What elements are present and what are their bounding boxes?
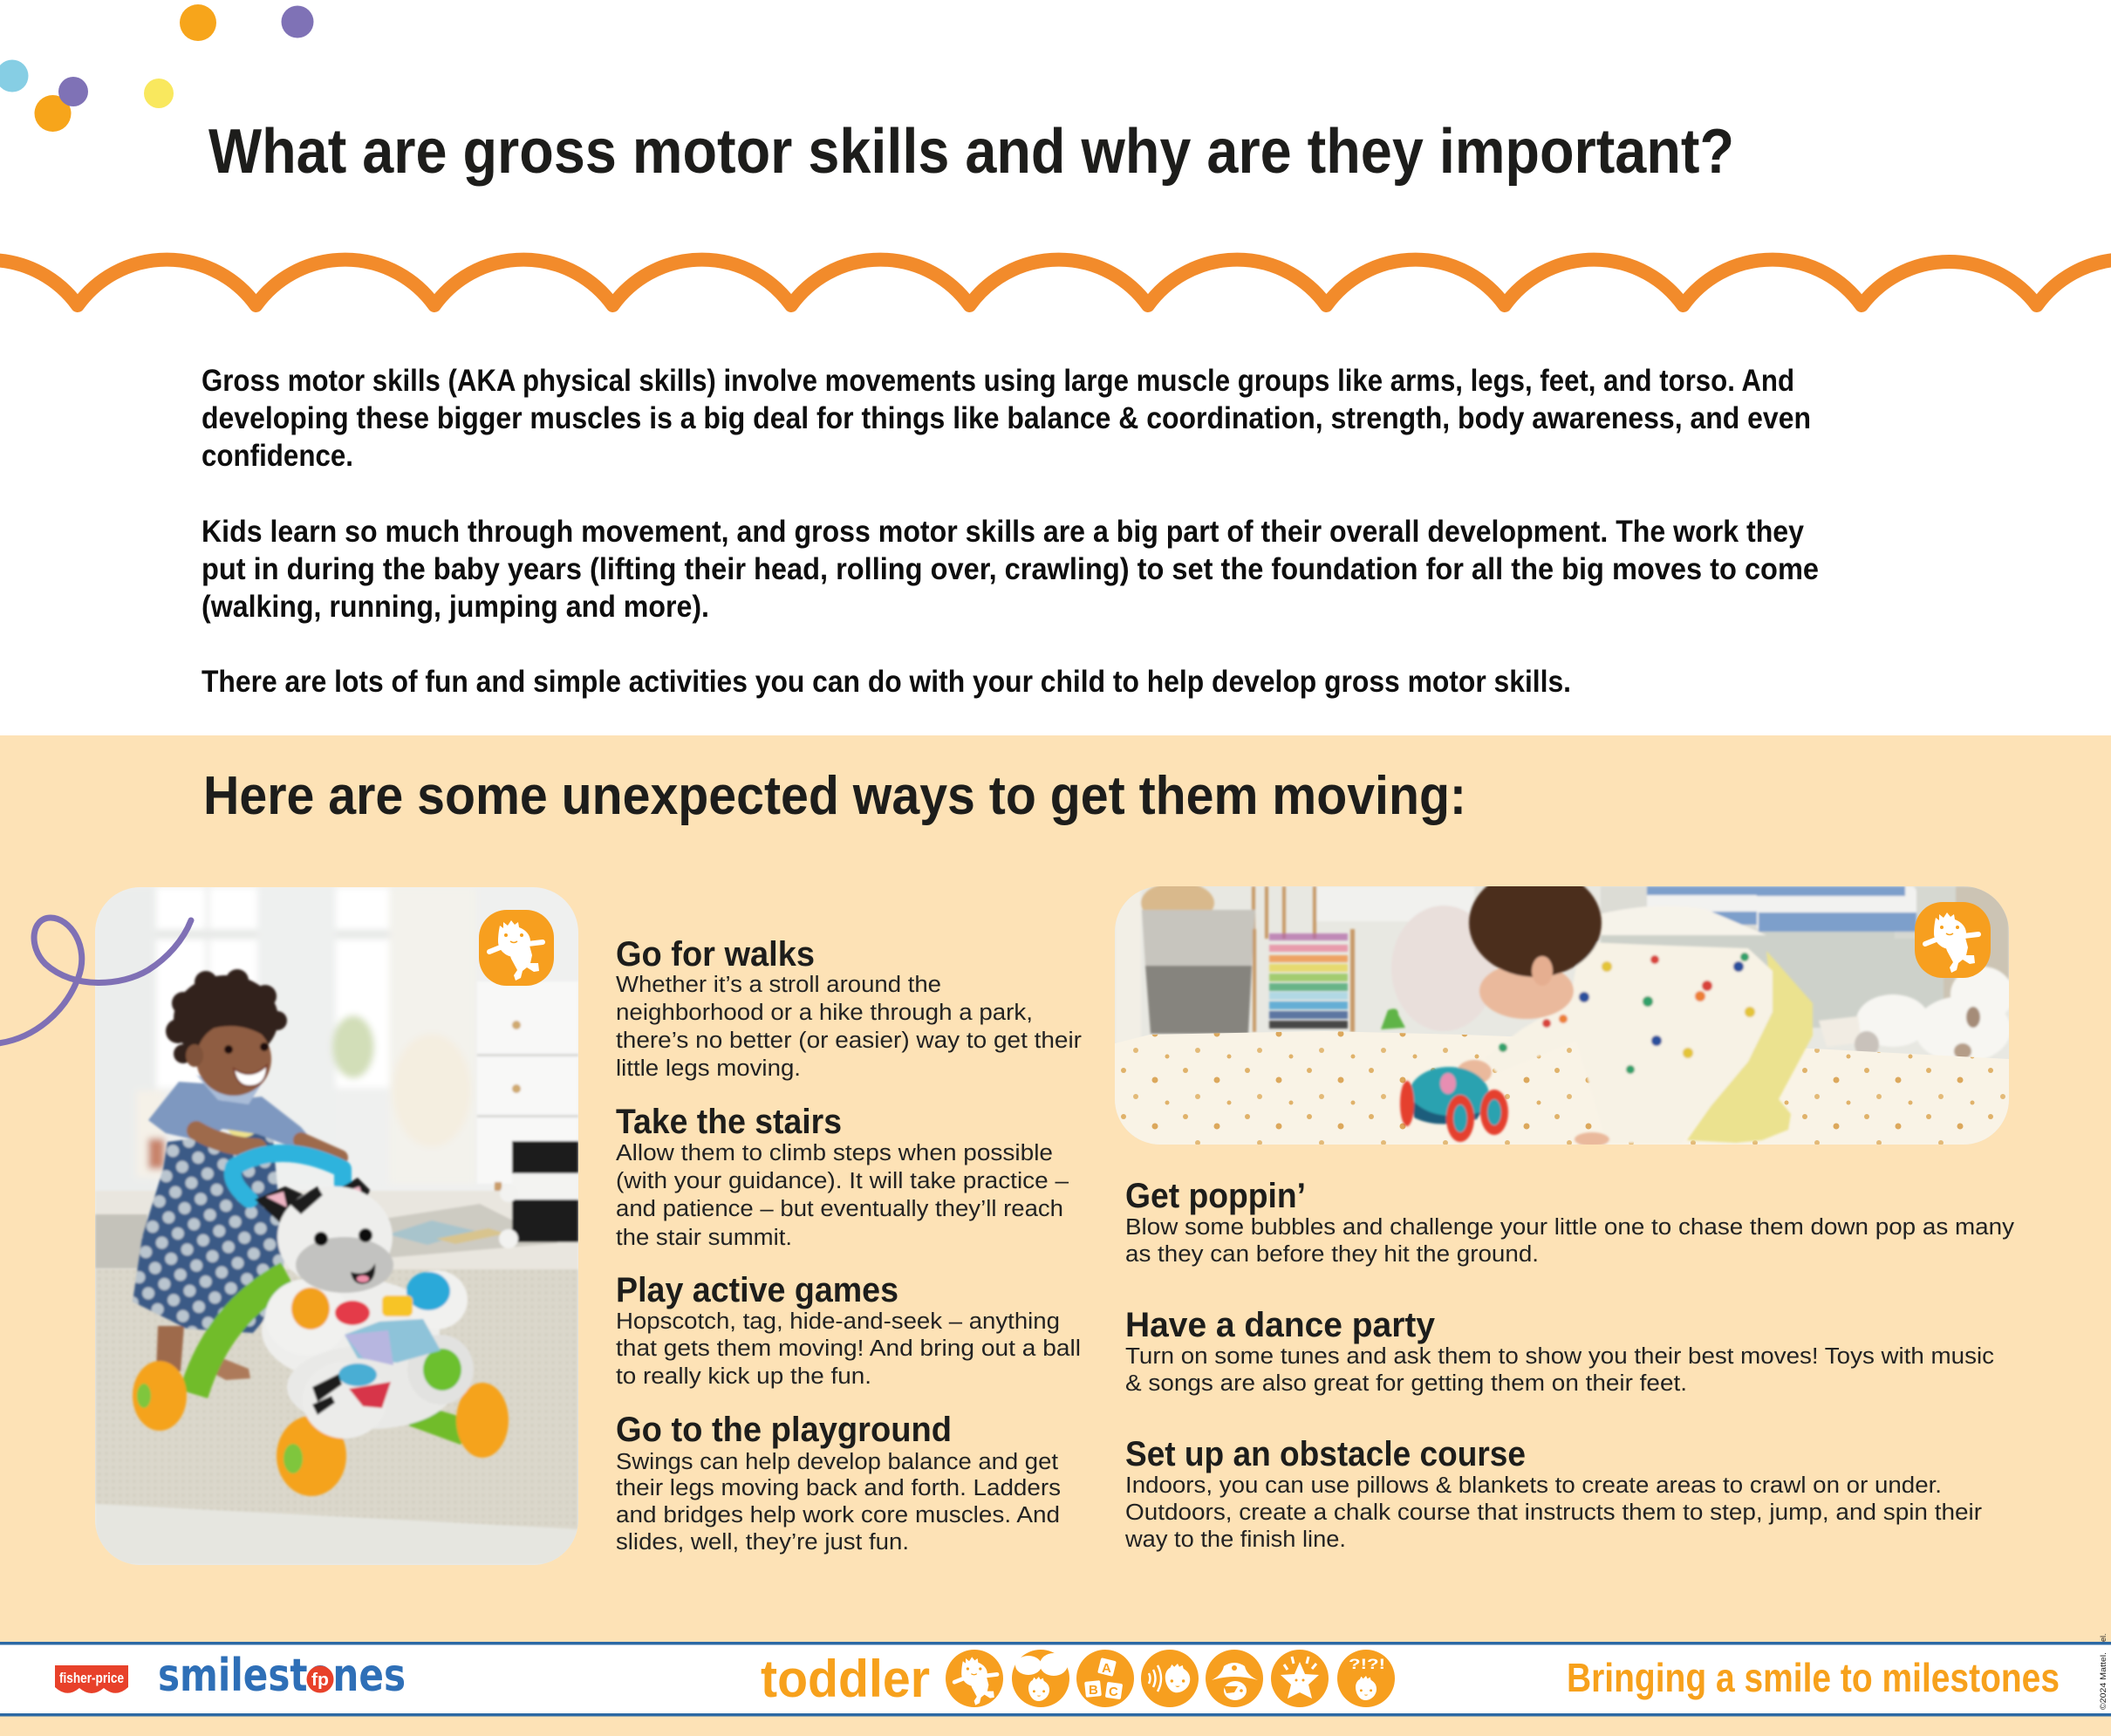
baby hand [1457,1060,1492,1084]
icon: pirate baby [1206,1650,1263,1707]
activity: Get poppin': Blow some bubbles and challenge your little one to chase them down pop as many [1125,1215,2014,1240]
activity: Go to the playground: Go to the playground [616,1411,952,1449]
logo: fisher-price [55,1665,128,1693]
child dress [133,1128,284,1333]
activity: Take the stairs: Take the stairs [616,1103,842,1141]
white plush cat [1949,966,2009,1013]
activity: Take the stairs: the stair summit. [616,1226,792,1250]
baby shirt [1485,942,1773,1143]
intro text block: put in during the baby years (lifting their head, rolling over, crawling) to set the foundation for all the big moves to come [202,552,1819,586]
intro text block: Kids learn so much through movement, and gross motor skills are a big part of their overall development. The work they [202,515,1804,549]
activity: Go to the playground: and bridges help work core muscles. And [616,1503,1060,1528]
striped pillows [1647,894,1757,912]
logo: smilestones: fp [311,1671,329,1690]
activity: Go to the playground: slides, well, they’re just fun. [616,1530,909,1555]
icon: walking baby badge [479,910,554,986]
abacus [1253,929,1355,1032]
child legs and feet [156,1326,184,1371]
copyright [2099,1633,2108,1710]
activity: Have a dance party: Have a dance party [1125,1306,1436,1344]
peach activities panel background [0,735,2111,1736]
activity: Take the stairs: and patience – but eventually they’ll reach [616,1197,1063,1221]
purple swirl [0,918,191,1043]
activity: Take the stairs [616,1103,1069,1250]
icon: walking baby badge [1915,902,1991,978]
icon: alphabet blocks [1076,1650,1134,1707]
baby head [1479,963,1574,1019]
patterned rug [1115,1031,2009,1145]
activity: Go for walks [616,935,1083,1081]
icon: question marks baby: ?!?! [1349,1656,1385,1672]
logo: smilestones: smilestones [158,1650,406,1702]
icon: alphabet blocks: B [1089,1683,1098,1698]
icon: sound waves baby [1141,1650,1199,1707]
icon: star baby [1271,1650,1329,1707]
scalloped orange divider [0,259,2111,305]
activity: Go for walks: little legs moving. [616,1056,801,1081]
knitted pouf [1391,906,1496,1031]
wheels [456,1383,509,1458]
toy car [1409,1067,1489,1123]
photo: toddler with zebra walker [95,887,578,1565]
logo: fisher-price: fisher-price [59,1670,124,1686]
left activity list [616,935,1083,1555]
activity: Go to the playground: Swings can help develop balance and get [616,1450,1058,1474]
green walker frame [194,1275,288,1394]
child face and hair [166,969,287,1063]
activity: Take the stairs: Allow them to climb steps when possible [616,1141,1053,1165]
icon: question marks baby [1337,1650,1395,1707]
storage basket [1142,910,1255,966]
intro text block [202,364,1819,699]
decorative confetti dots [0,4,314,132]
activity: Set up an obstacle course: way to the finish line. [1124,1528,1346,1552]
child arms [196,1131,257,1148]
activity: Go for walks: there’s no better (or easier) way to get their [616,1029,1083,1053]
activity: Get poppin': as they can before they hit the ground. [1125,1242,1539,1267]
copyright: ©2024 Mattel. [2099,1652,2108,1710]
intro text block: developing these bigger muscles is a big deal for things like balance & coordination, strength, body awareness, and even [202,401,1811,435]
activity: Play active games: Play active games [616,1271,898,1309]
icon row: milestone badges [946,1650,1395,1707]
activity: Go to the playground [616,1411,1061,1555]
activity: Go for walks: Go for walks [616,935,815,974]
icon: alphabet blocks: C [1109,1685,1118,1699]
photo: crawling baby with toy car [1115,869,2013,1146]
intro text block: There are lots of fun and simple activities you can do with your child to help develop gross motor skills. [202,665,1571,699]
activity: Set up an obstacle course: Indoors, you can use pillows & blankets to create areas to crawl on or under. [1125,1473,1942,1498]
activity: Go to the playground: their legs moving back and forth. Ladders [616,1476,1061,1500]
baby pants [1687,951,1813,1143]
intro text block: confidence. [202,439,353,473]
activity: Play active games: Hopscotch, tag, hide-and-seek – anything [616,1309,1060,1334]
icon: gross motor baby [946,1650,1003,1707]
intro text block: Gross motor skills (AKA physical skills) involve movements using large muscle groups like arms, legs, feet, and torso. And [202,364,1794,398]
activity: Get poppin' [1125,1177,2014,1267]
zebra head [255,1186,304,1223]
activity: Take the stairs: (with your guidance). It will take practice – [616,1169,1069,1193]
section heading: Here are some unexpected ways to get them moving: [203,766,1466,826]
icon: speech bubbles baby [1012,1650,1069,1707]
right activity list [1124,1177,2014,1552]
activity: Play active games: to really kick up the fun. [616,1364,871,1389]
activity: Set up an obstacle course: Set up an obstacle course [1125,1435,1526,1473]
activity: Play active games [616,1271,1081,1389]
sofa [1601,886,2009,939]
activity: Have a dance party [1125,1306,1994,1396]
footer bar [0,1642,2111,1717]
activity: Set up an obstacle course [1124,1435,1983,1552]
activity: Set up an obstacle course: Outdoors, create a chalk course that instructs them to step, jump, and spin their [1125,1500,1983,1525]
activity: Go for walks: Whether it’s a stroll around the [616,973,941,997]
walker handle [233,1153,343,1199]
copyright: el. [2099,1633,2108,1642]
child sleeves [148,1082,314,1147]
intro text block: (walking, running, jumping and more). [202,590,709,624]
title: What are gross motor skills and why are they important? [208,117,1734,187]
icon: alphabet blocks: A [1102,1661,1111,1676]
activity: Have a dance party: Turn on some tunes and ask them to show you their best moves! Toys with music [1125,1344,1994,1369]
activity: Get poppin': Get poppin’ [1125,1177,1306,1215]
stage label: toddler: toddler [761,1650,930,1708]
zebra body [260,1281,441,1371]
activity: Go for walks: neighborhood or a hike through a park, [616,1001,1033,1025]
activity: Have a dance party: & songs are also great for getting them on their feet. [1125,1371,1687,1396]
activity: Play active games: that gets them moving! And bring out a ball [616,1336,1081,1361]
